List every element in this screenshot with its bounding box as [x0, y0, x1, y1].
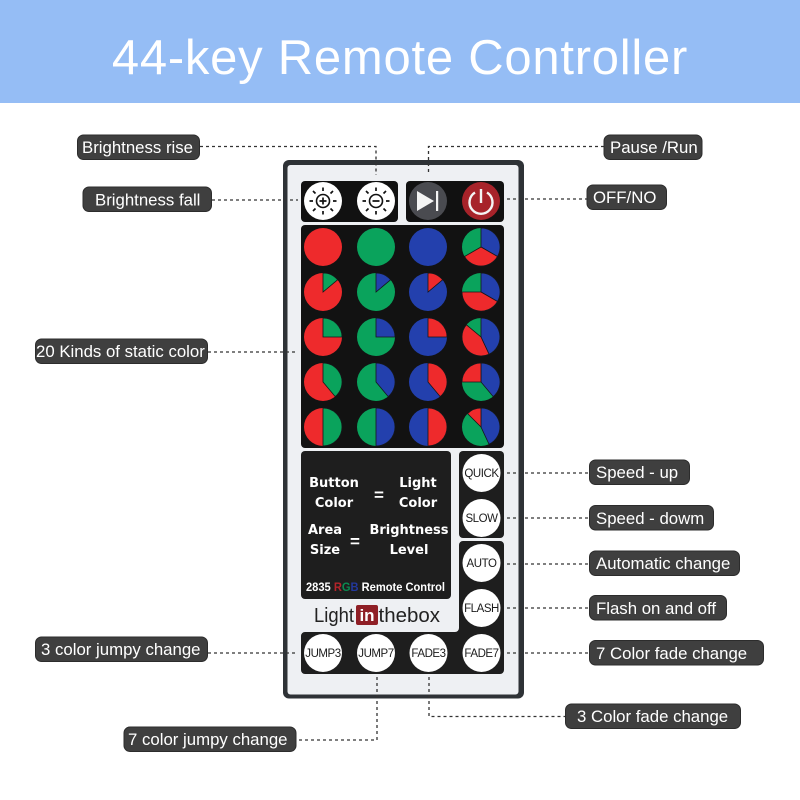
explanation text [308, 476, 449, 558]
button: fade3 [410, 634, 448, 672]
icon: brightness fall [357, 182, 395, 220]
label: speed down: Speed - dowm [596, 509, 704, 528]
button: fade7 [462, 634, 500, 672]
label: automatic change: Automatic change [596, 554, 730, 573]
panel caption: 2835 RGB Remote Control [306, 580, 445, 594]
pause and power buttons panel [406, 181, 504, 222]
header banner [0, 0, 800, 103]
label: speed up: Speed - up [596, 463, 678, 482]
button: jump3: JUMP3 [305, 648, 341, 660]
label: flash [590, 596, 726, 620]
row 2 [304, 273, 500, 311]
button: flash [462, 589, 500, 627]
explanation text: Brightness [369, 523, 449, 538]
button: auto: AUTO [467, 558, 497, 570]
label: pause/run [604, 135, 702, 160]
icon: brightness rise [304, 182, 342, 220]
explanation text: Size [310, 543, 340, 558]
title: 44-key Remote Controller [112, 31, 688, 85]
brand logo: thebox [378, 605, 440, 627]
row 3 [304, 318, 500, 356]
label: speed down [590, 506, 714, 530]
button: fade3: FADE3 [411, 648, 446, 660]
label: static colors: 20 Kinds of static color [36, 342, 205, 361]
speed buttons panel [459, 451, 504, 538]
label: off/no [587, 185, 666, 210]
label: off/no: OFF/NO [593, 188, 656, 207]
label: flash: Flash on and off [596, 599, 716, 618]
explanation panel [301, 451, 451, 599]
icon: pause/run [409, 182, 447, 220]
row 4 [304, 363, 500, 401]
label: 3 color jumpy: 3 color jumpy change [41, 640, 201, 659]
explanation text: Color [315, 496, 354, 511]
row 5 [304, 408, 500, 446]
label: 3 color fade: 3 Color fade change [577, 707, 728, 726]
button: jump3 [304, 634, 342, 672]
label: 7 color fade: 7 Color fade change [596, 644, 747, 663]
brightness buttons panel [301, 181, 398, 222]
explanation text: Level [390, 543, 428, 558]
label: brightness fall: Brightness fall [95, 190, 200, 210]
label: automatic change [590, 551, 740, 576]
icon: power [462, 182, 500, 220]
brand logo: Light [314, 605, 354, 627]
button: slow: SLOW [465, 513, 498, 525]
explanation text: Light [399, 476, 437, 491]
button: quick: QUICK [464, 468, 499, 480]
button: auto [462, 544, 500, 582]
brand logo [314, 605, 440, 627]
remote controller [283, 160, 524, 698]
label: 7 color jumpy: 7 color jumpy change [128, 730, 288, 749]
explanation text: Button [309, 476, 359, 491]
label: brightness fall [83, 187, 212, 212]
label: speed up [590, 460, 690, 484]
explanation text: = [374, 486, 384, 504]
label: brightness rise: Brightness rise [82, 138, 193, 157]
explanation text: = [350, 532, 360, 551]
button: fade7: FADE7 [464, 648, 499, 660]
button: jump7: JUMP7 [358, 648, 394, 660]
label: 7 color fade [590, 640, 764, 665]
static color buttons panel [301, 225, 504, 448]
mode buttons panel [301, 541, 504, 674]
explanation text: Color [399, 496, 438, 511]
brand logo: in [359, 606, 375, 625]
row 1 [304, 228, 500, 266]
explanation text: Area [308, 523, 342, 538]
label: pause/run: Pause /Run [610, 138, 698, 157]
button: jump7 [357, 634, 395, 672]
button: flash: FLASH [464, 603, 499, 615]
label: 3 color fade [566, 704, 740, 728]
